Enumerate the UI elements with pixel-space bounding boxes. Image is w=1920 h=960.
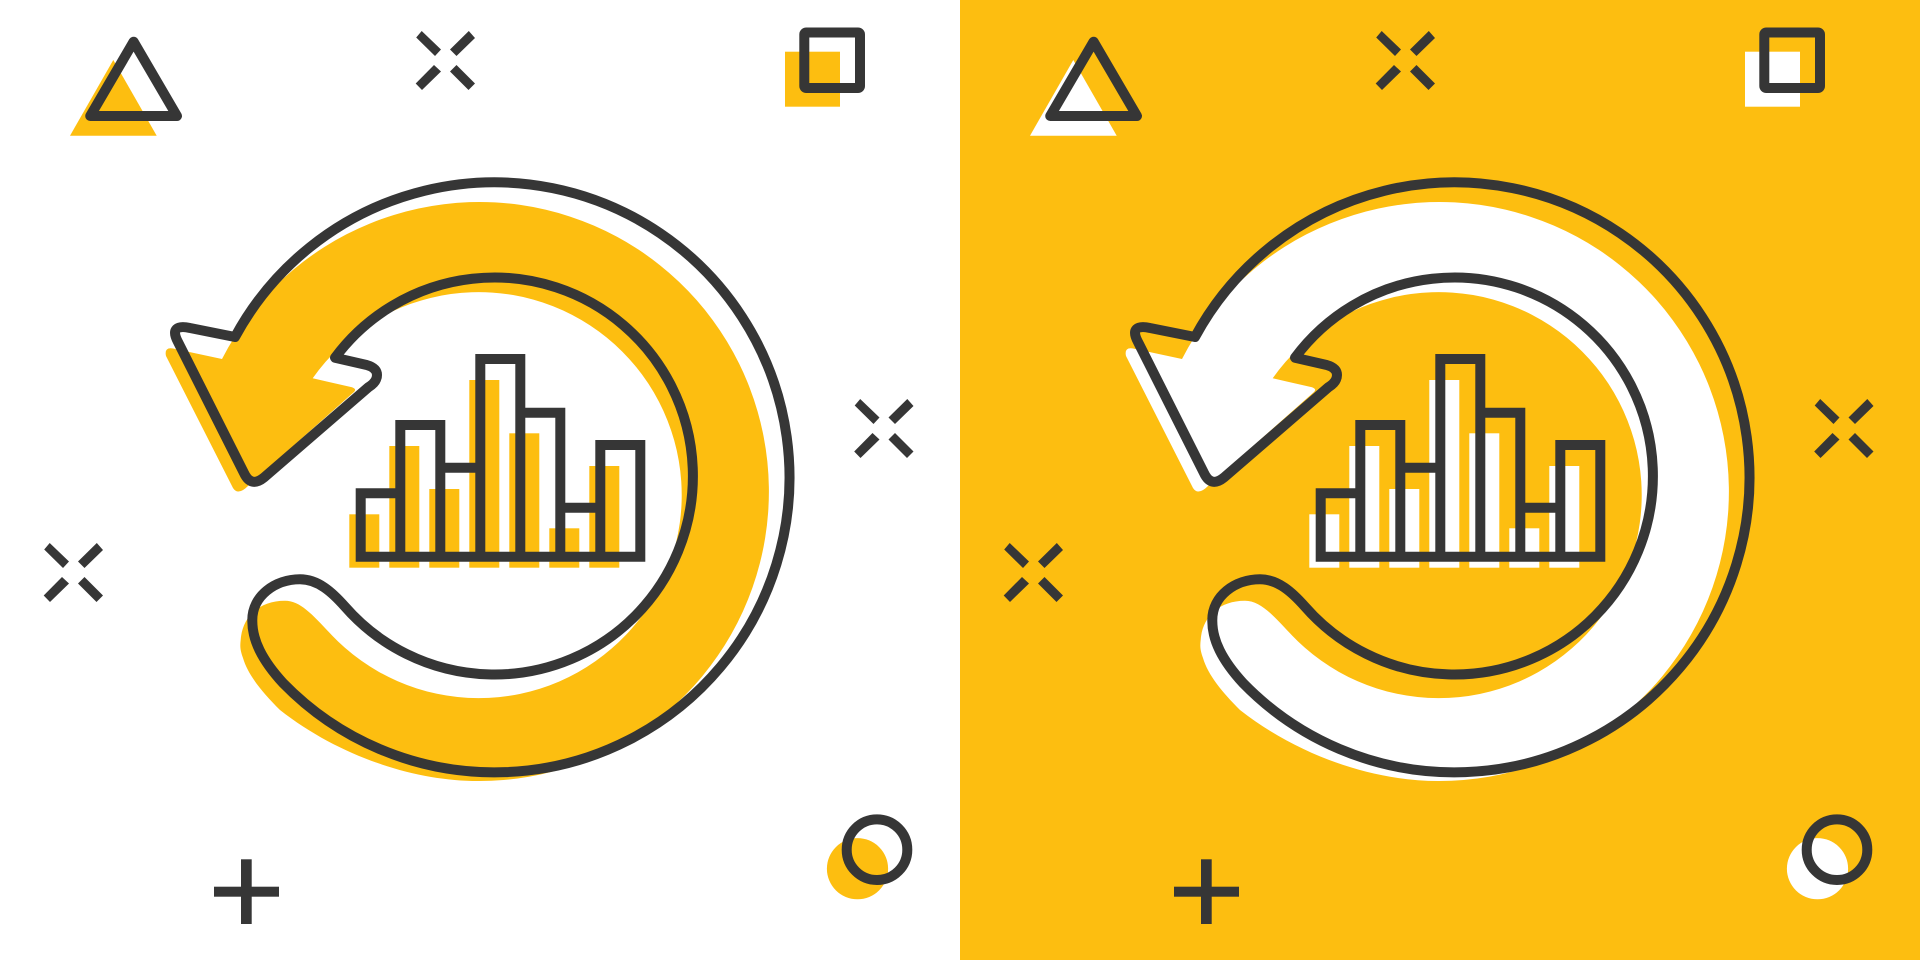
chart shadow bars: [349, 380, 619, 568]
icon: square, left: [785, 32, 860, 107]
icon: circle, right: [1787, 819, 1867, 899]
icon: triangle, right: [1030, 42, 1137, 136]
icon: plus, right: [1174, 859, 1239, 924]
bar chart, right: [1309, 359, 1600, 568]
icon: circle, left: [827, 819, 907, 899]
icon: refresh arrow, left: [166, 182, 789, 781]
icon: triangle, left: [70, 42, 177, 136]
icon: refresh arrow, right: [1126, 182, 1749, 781]
chart shadow bars, white: [1309, 380, 1579, 568]
icon: square, right: [1745, 32, 1820, 107]
icon: plus, left: [214, 859, 279, 924]
icon: cross marks, top right: [1376, 31, 1435, 90]
bar chart, left: [349, 359, 640, 568]
icon: cross marks, right of ring, left panel: [854, 399, 914, 458]
panel: yellow background, right: [960, 0, 1920, 960]
chart outline bars, right: [1321, 359, 1600, 557]
panel: white background, left: [0, 0, 960, 960]
icon: cross marks, lower left of right panel: [1004, 543, 1063, 602]
chart outline bars: [361, 359, 640, 557]
icon: cross marks, lower left: [44, 543, 103, 602]
icon: cross marks, right of ring, right panel: [1814, 399, 1874, 458]
icon: cross marks, top left: [416, 31, 475, 90]
